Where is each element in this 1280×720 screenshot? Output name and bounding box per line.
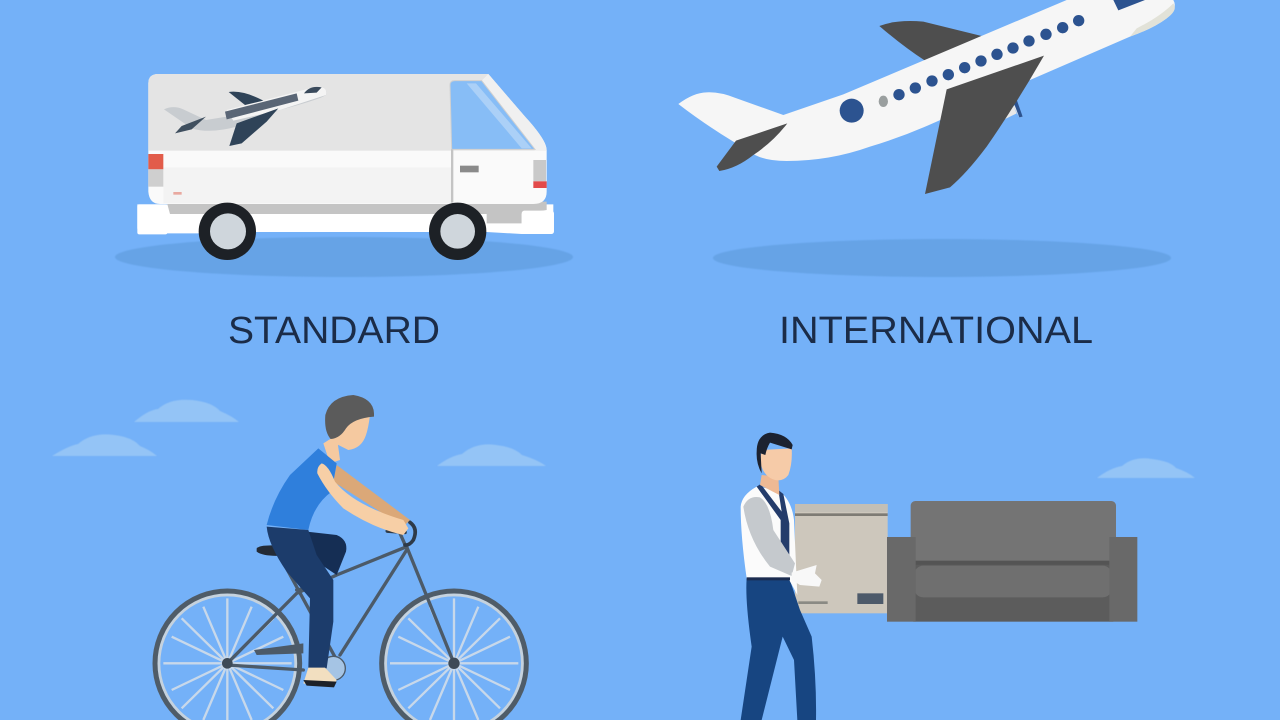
- plane shadow: [713, 239, 1171, 277]
- saddle: [257, 545, 282, 556]
- far wing: [879, 21, 982, 61]
- heading: international: INTERNATIONAL: [779, 310, 1093, 352]
- neck and head: [757, 433, 793, 495]
- near arm: [317, 463, 408, 535]
- torso: [267, 448, 337, 530]
- far leg: [307, 532, 346, 575]
- windows: [840, 15, 1084, 123]
- neck and head: [323, 395, 374, 463]
- cloud 2: [52, 434, 157, 456]
- near wing: [925, 56, 1044, 194]
- cloud 4: [1097, 458, 1195, 478]
- cockpit window: [1113, 0, 1145, 10]
- far arm: [333, 465, 410, 527]
- heading: standard: STANDARD: [228, 310, 440, 352]
- landing gear: [995, 103, 1023, 124]
- rear wheel: [199, 203, 256, 260]
- icon: delivery van: [137, 74, 554, 260]
- tail fin: [717, 123, 787, 171]
- cloud 3: [437, 444, 546, 466]
- cloud 1: [134, 400, 239, 422]
- near leg: [267, 527, 333, 668]
- belt: [747, 577, 790, 580]
- hand: [792, 565, 822, 587]
- shirt: [741, 487, 797, 595]
- icon: delivery man with box: [741, 433, 1137, 720]
- handlebar: [387, 522, 415, 545]
- van bumper corners: [137, 204, 554, 234]
- fuselage: [678, 0, 1175, 161]
- front wheel: [382, 591, 526, 720]
- front wheel: [429, 203, 486, 260]
- rear wheel: [155, 591, 300, 720]
- sleeve: [743, 497, 795, 576]
- icon: airplane: [678, 0, 1175, 194]
- bike frame: [227, 533, 454, 670]
- legs: [741, 578, 816, 720]
- icon: plane decal on van: [164, 87, 326, 146]
- icon: cyclist: [155, 395, 526, 720]
- shoe: [303, 668, 337, 687]
- sofa: [887, 501, 1137, 622]
- lanyard and tie: [757, 484, 789, 555]
- van shadow: [115, 237, 573, 277]
- cardboard box: [795, 504, 888, 613]
